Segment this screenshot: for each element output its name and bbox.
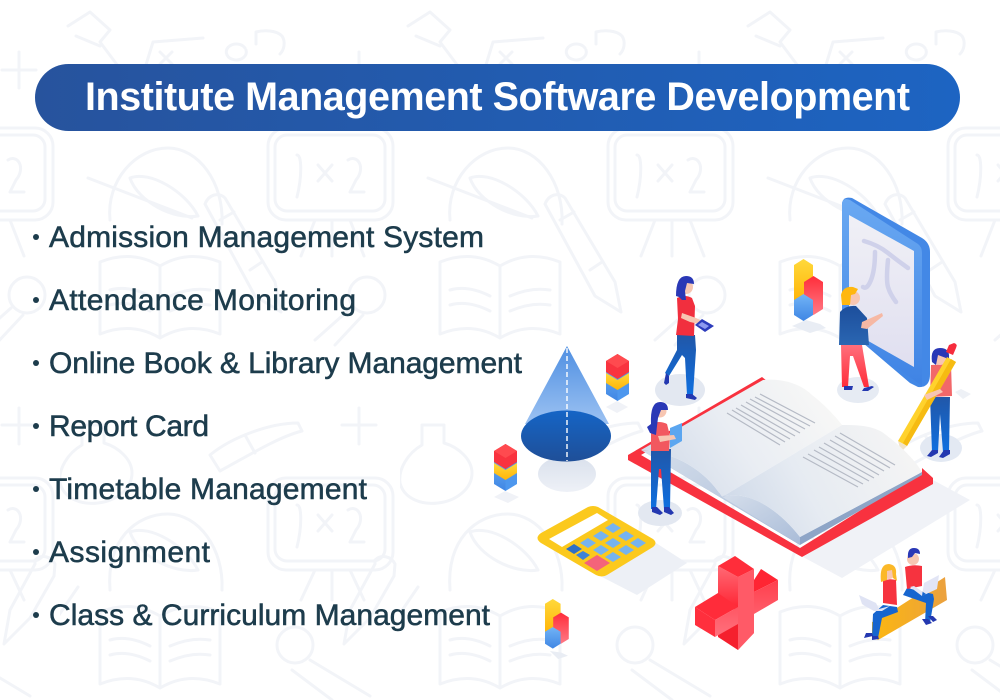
list item: timetable: Timetable Management	[49, 473, 368, 506]
figure: walking woman with tablet	[655, 276, 714, 406]
right page underside	[722, 495, 800, 545]
student: woman with laptop	[859, 564, 898, 640]
right page	[722, 425, 922, 537]
list item: report card: Report Card	[49, 410, 209, 443]
icon: calculator	[538, 506, 656, 576]
figure: man at tablet	[837, 287, 883, 403]
list item: admission: Admission Management System	[49, 221, 484, 254]
list item: attendance: Attendance Monitoring	[49, 284, 356, 317]
icon: tablet with pi	[842, 198, 930, 387]
icon: pencil and woman holding it	[898, 343, 971, 462]
icon: red plus	[695, 556, 778, 650]
text lines	[727, 394, 895, 487]
icon: stacked block lower left	[494, 444, 519, 503]
calculator keys	[566, 523, 646, 571]
title: Institute Management Software Development	[85, 75, 910, 119]
icon: open book	[628, 377, 933, 557]
calculator shadow	[602, 543, 687, 595]
feature list	[33, 221, 523, 632]
icon: bar blocks upper	[792, 259, 826, 333]
students on bench	[859, 548, 947, 640]
figure: woman in front of book	[638, 402, 682, 526]
bench	[872, 577, 947, 640]
icon: bar blocks lower	[545, 599, 569, 659]
list item: class and curriculum: Class & Curriculum Management	[49, 599, 491, 632]
left page underside	[641, 450, 800, 545]
pencil	[898, 343, 957, 452]
list item: library: Online Book & Library Management	[49, 347, 523, 380]
left page	[641, 380, 842, 497]
red cover	[628, 377, 933, 557]
icon: cone	[521, 346, 611, 492]
title banner	[35, 64, 960, 131]
list item: assignment: Assignment	[49, 536, 211, 569]
book shadow	[803, 480, 970, 578]
student: man with laptop	[903, 548, 939, 625]
pi symbol	[863, 241, 908, 302]
icon: stacked block right of cone	[606, 354, 629, 413]
